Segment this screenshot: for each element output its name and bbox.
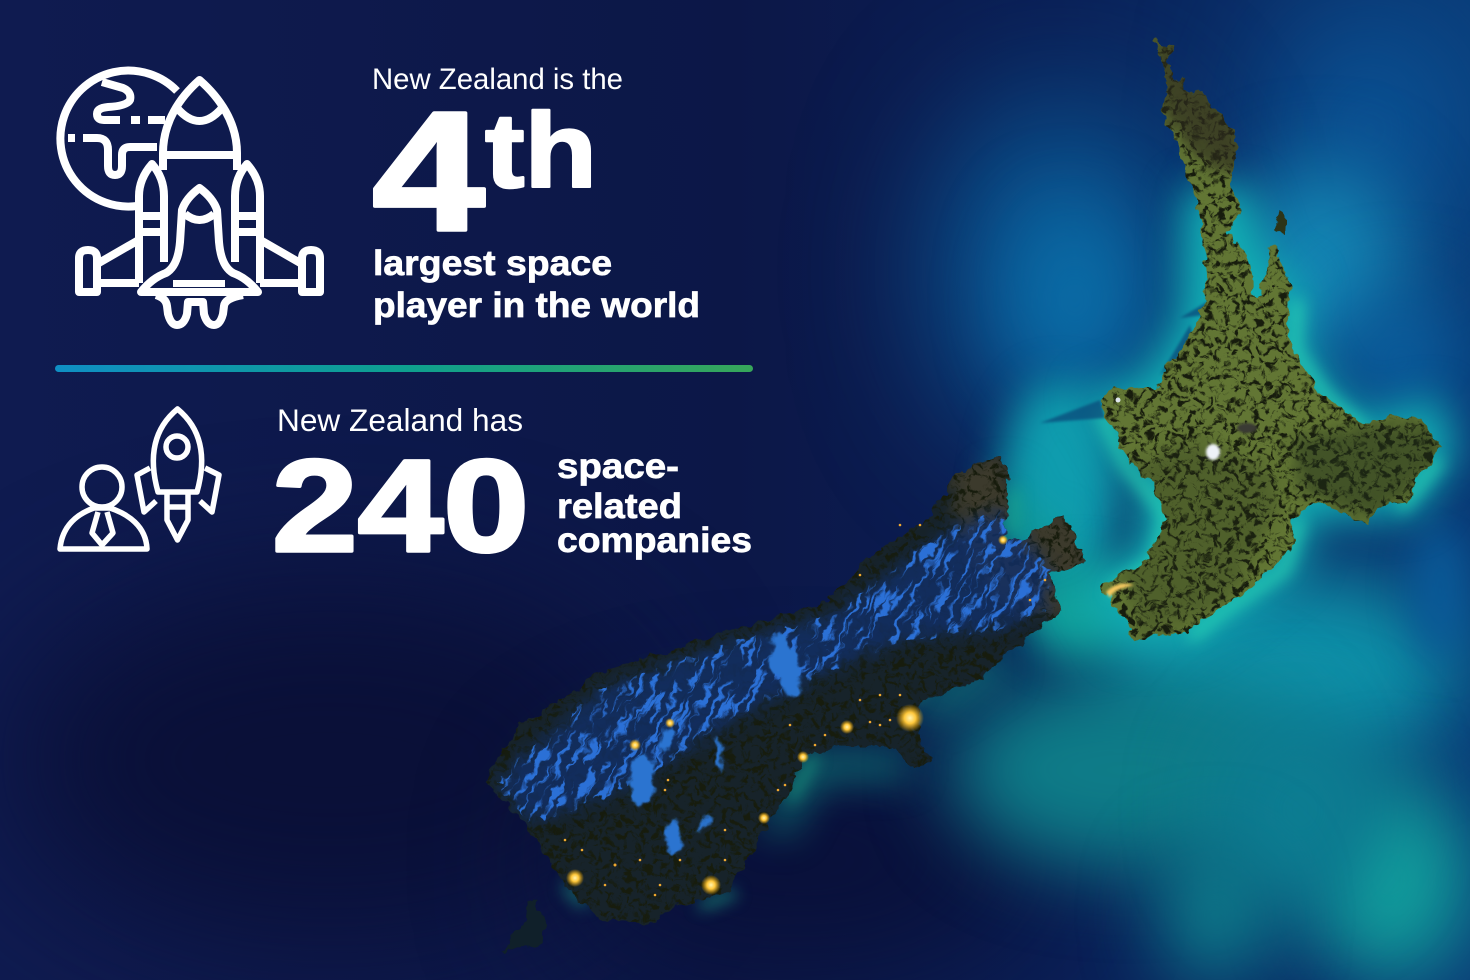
island shape [486,455,1086,923]
alps shading [497,510,1050,820]
text: largest space player in the world [373,244,700,325]
small town lights [564,524,1046,896]
right booster [235,164,260,283]
person tie [92,512,113,545]
offshore islands [1274,210,1286,236]
rocket body [153,409,202,492]
snow blobs [626,632,806,855]
text: space-related companies [557,447,752,560]
rocket exhaust [167,493,188,540]
icon: business person and rocket [60,409,219,549]
big number: 4th: 4 [372,77,485,267]
heading: New Zealand is the: New Zealand is the [372,63,623,96]
land: South Island [486,456,1086,954]
right wing and fin [260,241,320,292]
person head [82,467,122,507]
person shoulders [60,508,147,549]
snow-blue alps texture west [497,646,723,822]
snow-blue alps texture east [888,510,1052,645]
rocket fins [137,468,219,512]
engine nozzles [156,295,243,325]
island body [1100,30,1445,640]
dark forest texture [1100,40,1443,640]
gradient divider [55,365,753,372]
island body [486,456,1086,954]
globe outline [60,71,177,207]
Stewart Island [503,897,548,950]
orbiter [141,188,258,292]
text: largest space player in the world: player in the world [373,286,700,325]
big number: 4th [372,77,597,267]
land: North Island [1040,30,1445,640]
rocket window [166,436,188,458]
snow-blue alps texture central [717,580,892,724]
big number: 4th: th [485,92,597,210]
globe continents [68,82,165,175]
Wellington lights [1106,584,1134,598]
icon: globe and space shuttle [60,71,320,325]
island shadows [1040,300,1210,423]
left wing and fin [79,241,139,292]
peaks and lake [1116,398,1257,460]
big number: 240: 240 [272,432,529,579]
island base colour [1100,40,1443,640]
left booster [139,164,164,283]
city lights glow [566,535,1008,895]
heading: New Zealand has: New Zealand has [277,402,523,438]
text: space-related companies: space- [557,447,679,486]
cargo slot [173,280,225,287]
text: space-related companies: companies [557,521,752,560]
shuttle fuel tank [163,80,237,170]
regional tone [1100,30,1445,640]
text: largest space player in the world: largest space [373,244,612,283]
north-east brown uplands [950,450,1090,620]
text: space-related companies: related [557,487,682,526]
